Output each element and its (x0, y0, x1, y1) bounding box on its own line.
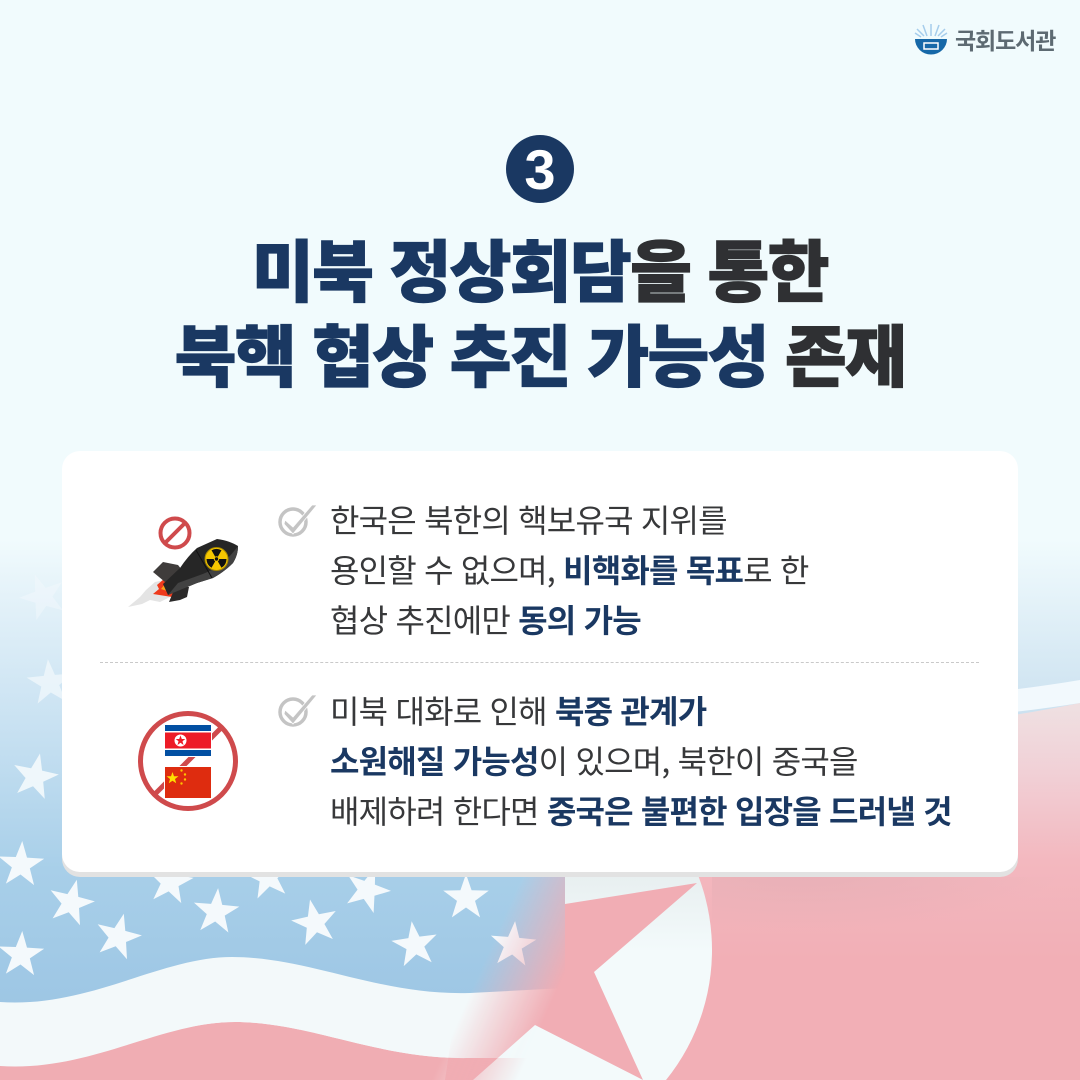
fins (153, 562, 182, 582)
line 1: 미북 대화로 인해 북중 관계가 (330, 687, 706, 733)
logo: National Assembly Library (914, 22, 1056, 56)
icon: crossed-out flags (138, 711, 238, 811)
line 1: 한국은 북한의 핵보유국 지위를 (330, 496, 727, 542)
logo text: 국회도서관 (955, 22, 1055, 56)
icon: check mark 1 (278, 505, 316, 537)
number badge: 3 (524, 138, 556, 201)
smoke (128, 580, 172, 607)
white gap (164, 724, 212, 757)
icon: check mark 2 (278, 695, 316, 727)
title line 1: 미북 정상회담을 통한 (252, 219, 828, 316)
pink field of North Korean flag (300, 703, 1080, 1080)
icon: nuclear rocket with prohibition sign (128, 516, 238, 607)
prohibition ring (140, 714, 236, 808)
radiation symbol (205, 548, 228, 570)
stars (0, 611, 536, 975)
shadow tint under card (712, 877, 1080, 947)
line 2: 소원해질 가능성이 있으며, 북한이 중국을 (330, 737, 858, 783)
card (62, 451, 1018, 872)
line 3: 배제하려 한다면 중국은 불편한 입장을 드러낼 것 (330, 787, 952, 833)
logo icon (914, 24, 948, 54)
red wave (0, 1022, 565, 1080)
white wave (0, 957, 565, 1066)
number badge (506, 135, 574, 203)
background: flags (0, 575, 1080, 1080)
North Korean flag star (400, 877, 697, 1080)
sky gradient (0, 540, 1080, 720)
text block 1 (330, 496, 809, 642)
title line 2: 북핵 협상 추진 가능성 존재 (175, 304, 905, 401)
Chinese flag (165, 767, 211, 798)
flame (153, 579, 176, 597)
line 2: 용인할 수 없으며, 비핵화를 목표로 한 (330, 546, 809, 592)
divider (100, 662, 979, 663)
white stripe right (700, 680, 1080, 721)
North Korean flag circle (298, 743, 712, 1080)
title (175, 219, 905, 401)
line 3: 협상 추진에만 동의 가능 (330, 596, 641, 642)
text block 2 (330, 687, 952, 833)
US flag (0, 614, 565, 1080)
prohibition sign (160, 518, 190, 548)
North Korean flag (165, 725, 211, 756)
rocket body (163, 539, 238, 595)
